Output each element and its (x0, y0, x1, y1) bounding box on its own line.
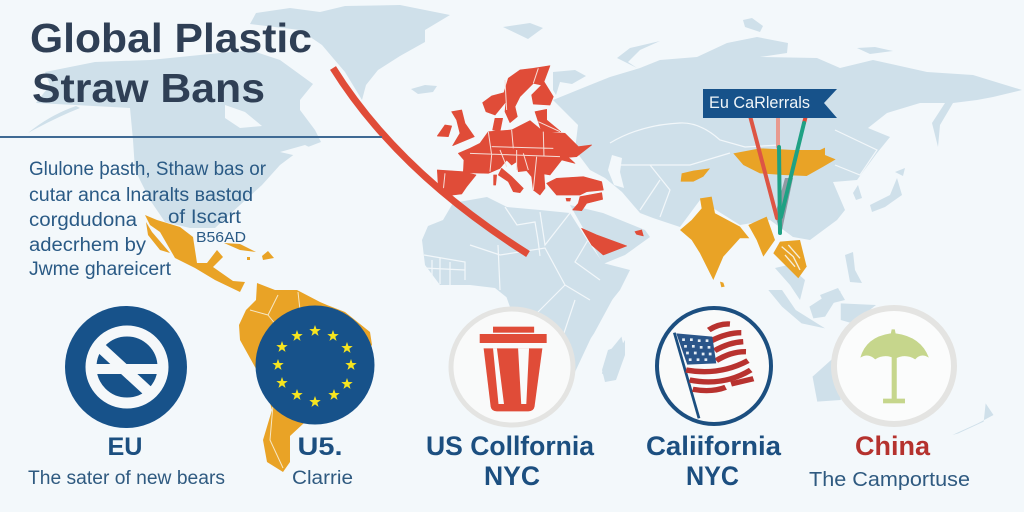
lower indian ocean islands (504, 290, 993, 435)
arabia (570, 205, 650, 264)
europe borders (443, 68, 560, 190)
mexico and central america (145, 215, 245, 292)
new zealand (952, 403, 993, 435)
mongolia (733, 148, 836, 176)
label: China: China (855, 431, 931, 461)
madagascar (602, 340, 625, 382)
caption: US: Clarrie (292, 468, 353, 489)
red pointer top (804, 112, 807, 123)
intro paragraph: Glulone þasth, Sthaw bas or (29, 159, 267, 180)
mongolia and asian ban zone (680, 148, 836, 287)
red pointer (749, 112, 777, 218)
iceland (411, 85, 437, 94)
divider line (0, 136, 382, 138)
north america (36, 50, 321, 228)
label: US California NYC: US Collfornia (426, 431, 595, 461)
intro paragraph: Jwme ghareicert (29, 259, 172, 280)
label: US: U5. (298, 433, 342, 461)
pale pointer (776, 118, 780, 147)
title: Straw Bans (32, 65, 265, 111)
caribbean islands (224, 243, 274, 260)
ireland (437, 125, 452, 137)
japan (853, 168, 905, 212)
red arc (333, 68, 528, 254)
central asia patch (681, 168, 710, 182)
denmark (493, 118, 503, 132)
baltics (535, 109, 561, 132)
kola peninsula (553, 70, 586, 95)
label: US California NYC: NYC (484, 461, 540, 491)
intro paragraph (29, 159, 267, 280)
hudson bay and gulf of st lawrence (225, 105, 325, 160)
novaya zemlya (617, 41, 660, 68)
caption: EU: The sater of new bears (28, 468, 225, 489)
iberia (437, 170, 476, 196)
intro paragraph: corgdudona (29, 210, 137, 231)
kara sea islands (503, 18, 893, 54)
label: California NYC (646, 431, 782, 491)
caspian sea (608, 155, 624, 188)
intro paragraph: cutar anca lnaralts ʙastɑd (29, 185, 253, 206)
icon: us flag (657, 308, 771, 424)
icon: no straw (65, 306, 187, 428)
asia (553, 37, 1022, 240)
indonesia (768, 290, 876, 328)
green pointer center (779, 147, 780, 233)
banner pointer lines (749, 112, 807, 235)
italy (494, 168, 523, 193)
africa (422, 197, 630, 372)
intro paragraph: adecrhem by (29, 235, 147, 256)
banner (703, 89, 837, 118)
alaska coast strip (28, 106, 80, 133)
europe ban zone, red (437, 66, 643, 255)
south america borders (250, 292, 300, 468)
gulf spot (635, 230, 643, 236)
madagascar (602, 337, 625, 380)
world map base (28, 5, 1022, 382)
caption: China: The Camportuse (809, 469, 970, 491)
title: Global Plastic (30, 15, 312, 61)
indochina (773, 240, 807, 278)
southeast asia (775, 252, 862, 305)
scandinavia and finland (483, 66, 553, 123)
title (30, 15, 312, 111)
australia (813, 358, 841, 402)
label: California NYC: NYC (686, 461, 739, 491)
south america (239, 283, 372, 472)
intro paragraph: of Iscart (168, 207, 242, 228)
country borders on map (424, 123, 877, 360)
india (680, 197, 749, 280)
icon: umbrella (834, 308, 954, 424)
east africa coast (504, 290, 618, 360)
label: US California NYC (426, 431, 595, 491)
britain (452, 110, 474, 146)
turkey (547, 177, 603, 195)
sri lanka (720, 282, 725, 287)
grey wedge (775, 178, 793, 235)
arabia wedge (582, 228, 627, 255)
central american and south american ban zone (145, 215, 372, 472)
label: EU: EU (108, 433, 142, 461)
intro paragraph: B56AD (196, 229, 246, 246)
greenland (250, 5, 450, 100)
label: California NYC: Caliifornia (646, 431, 782, 461)
levant (566, 193, 603, 211)
green pointer right (781, 123, 804, 217)
continental europe (458, 121, 592, 195)
baja california (146, 222, 170, 253)
icon: eu flag (256, 306, 374, 424)
banner text: Eu CaRlerrals (709, 93, 810, 112)
myanmar (748, 217, 775, 257)
indochina borders (782, 245, 800, 270)
icon: trash can (451, 309, 573, 425)
